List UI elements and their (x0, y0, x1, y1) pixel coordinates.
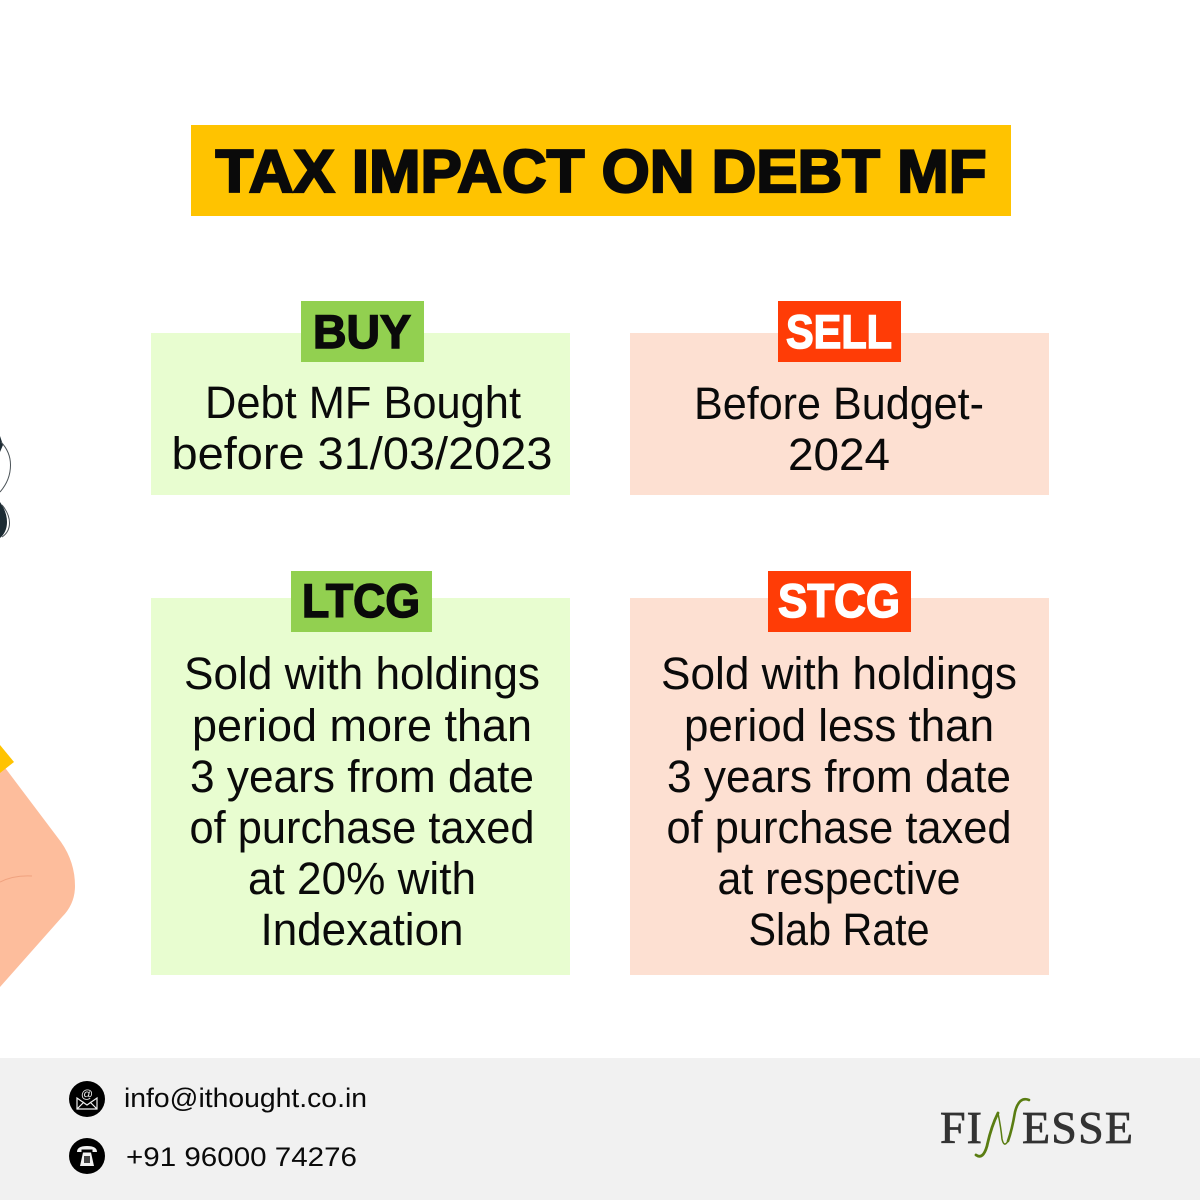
logo: finesse: ESSE (1022, 1102, 1133, 1153)
stcg text: of purchase taxed (666, 802, 1012, 853)
stcg text: Slab Rate (748, 904, 930, 955)
buy text (172, 377, 552, 479)
buy text: before 31/03/2023 (172, 428, 552, 479)
icon: telephone (69, 1138, 105, 1174)
buy heading: BUY (313, 305, 411, 358)
title: TAX IMPACT ON DEBT MF (216, 138, 986, 205)
illustration: cropped hand at left edge (0, 745, 75, 987)
panel: stcg (630, 571, 1049, 975)
sell text: Before Budget- (694, 378, 984, 429)
stcg text: period less than (684, 700, 994, 751)
panel: buy (151, 301, 570, 495)
illustration: cropped hair at left edge (0, 436, 10, 538)
email text: info@ithought.co.in (124, 1083, 367, 1113)
panel: sell (630, 301, 1049, 495)
ltcg text: Indexation (260, 904, 464, 955)
ltcg text: at 20% with (248, 853, 476, 904)
sell text: 2024 (788, 429, 890, 480)
buy text: Debt MF Bought (205, 377, 521, 428)
stcg text: 3 years from date (667, 751, 1011, 802)
icon: envelope (69, 1081, 105, 1117)
footer bar (0, 1058, 1200, 1200)
ltcg text: of purchase taxed (190, 802, 534, 853)
stcg text: Sold with holdings (661, 648, 1017, 699)
icon: envelope: @ (81, 1087, 93, 1101)
ltcg text: 3 years from date (190, 751, 534, 802)
ltcg heading: LTCG (302, 574, 420, 627)
sell text (694, 378, 984, 480)
ltcg text: Sold with holdings (184, 648, 540, 699)
stcg heading: STCG (778, 574, 900, 627)
logo: finesse (940, 1099, 1133, 1156)
ltcg text: period more than (192, 700, 532, 751)
phone text: +91 96000 74276 (126, 1142, 357, 1172)
sell heading: SELL (786, 305, 892, 358)
stcg text (661, 648, 1017, 955)
title (191, 125, 1011, 216)
logo: finesse: FI (940, 1102, 982, 1153)
ltcg text (184, 648, 540, 955)
stcg text: at respective (718, 853, 960, 904)
panel: ltcg (151, 571, 570, 975)
